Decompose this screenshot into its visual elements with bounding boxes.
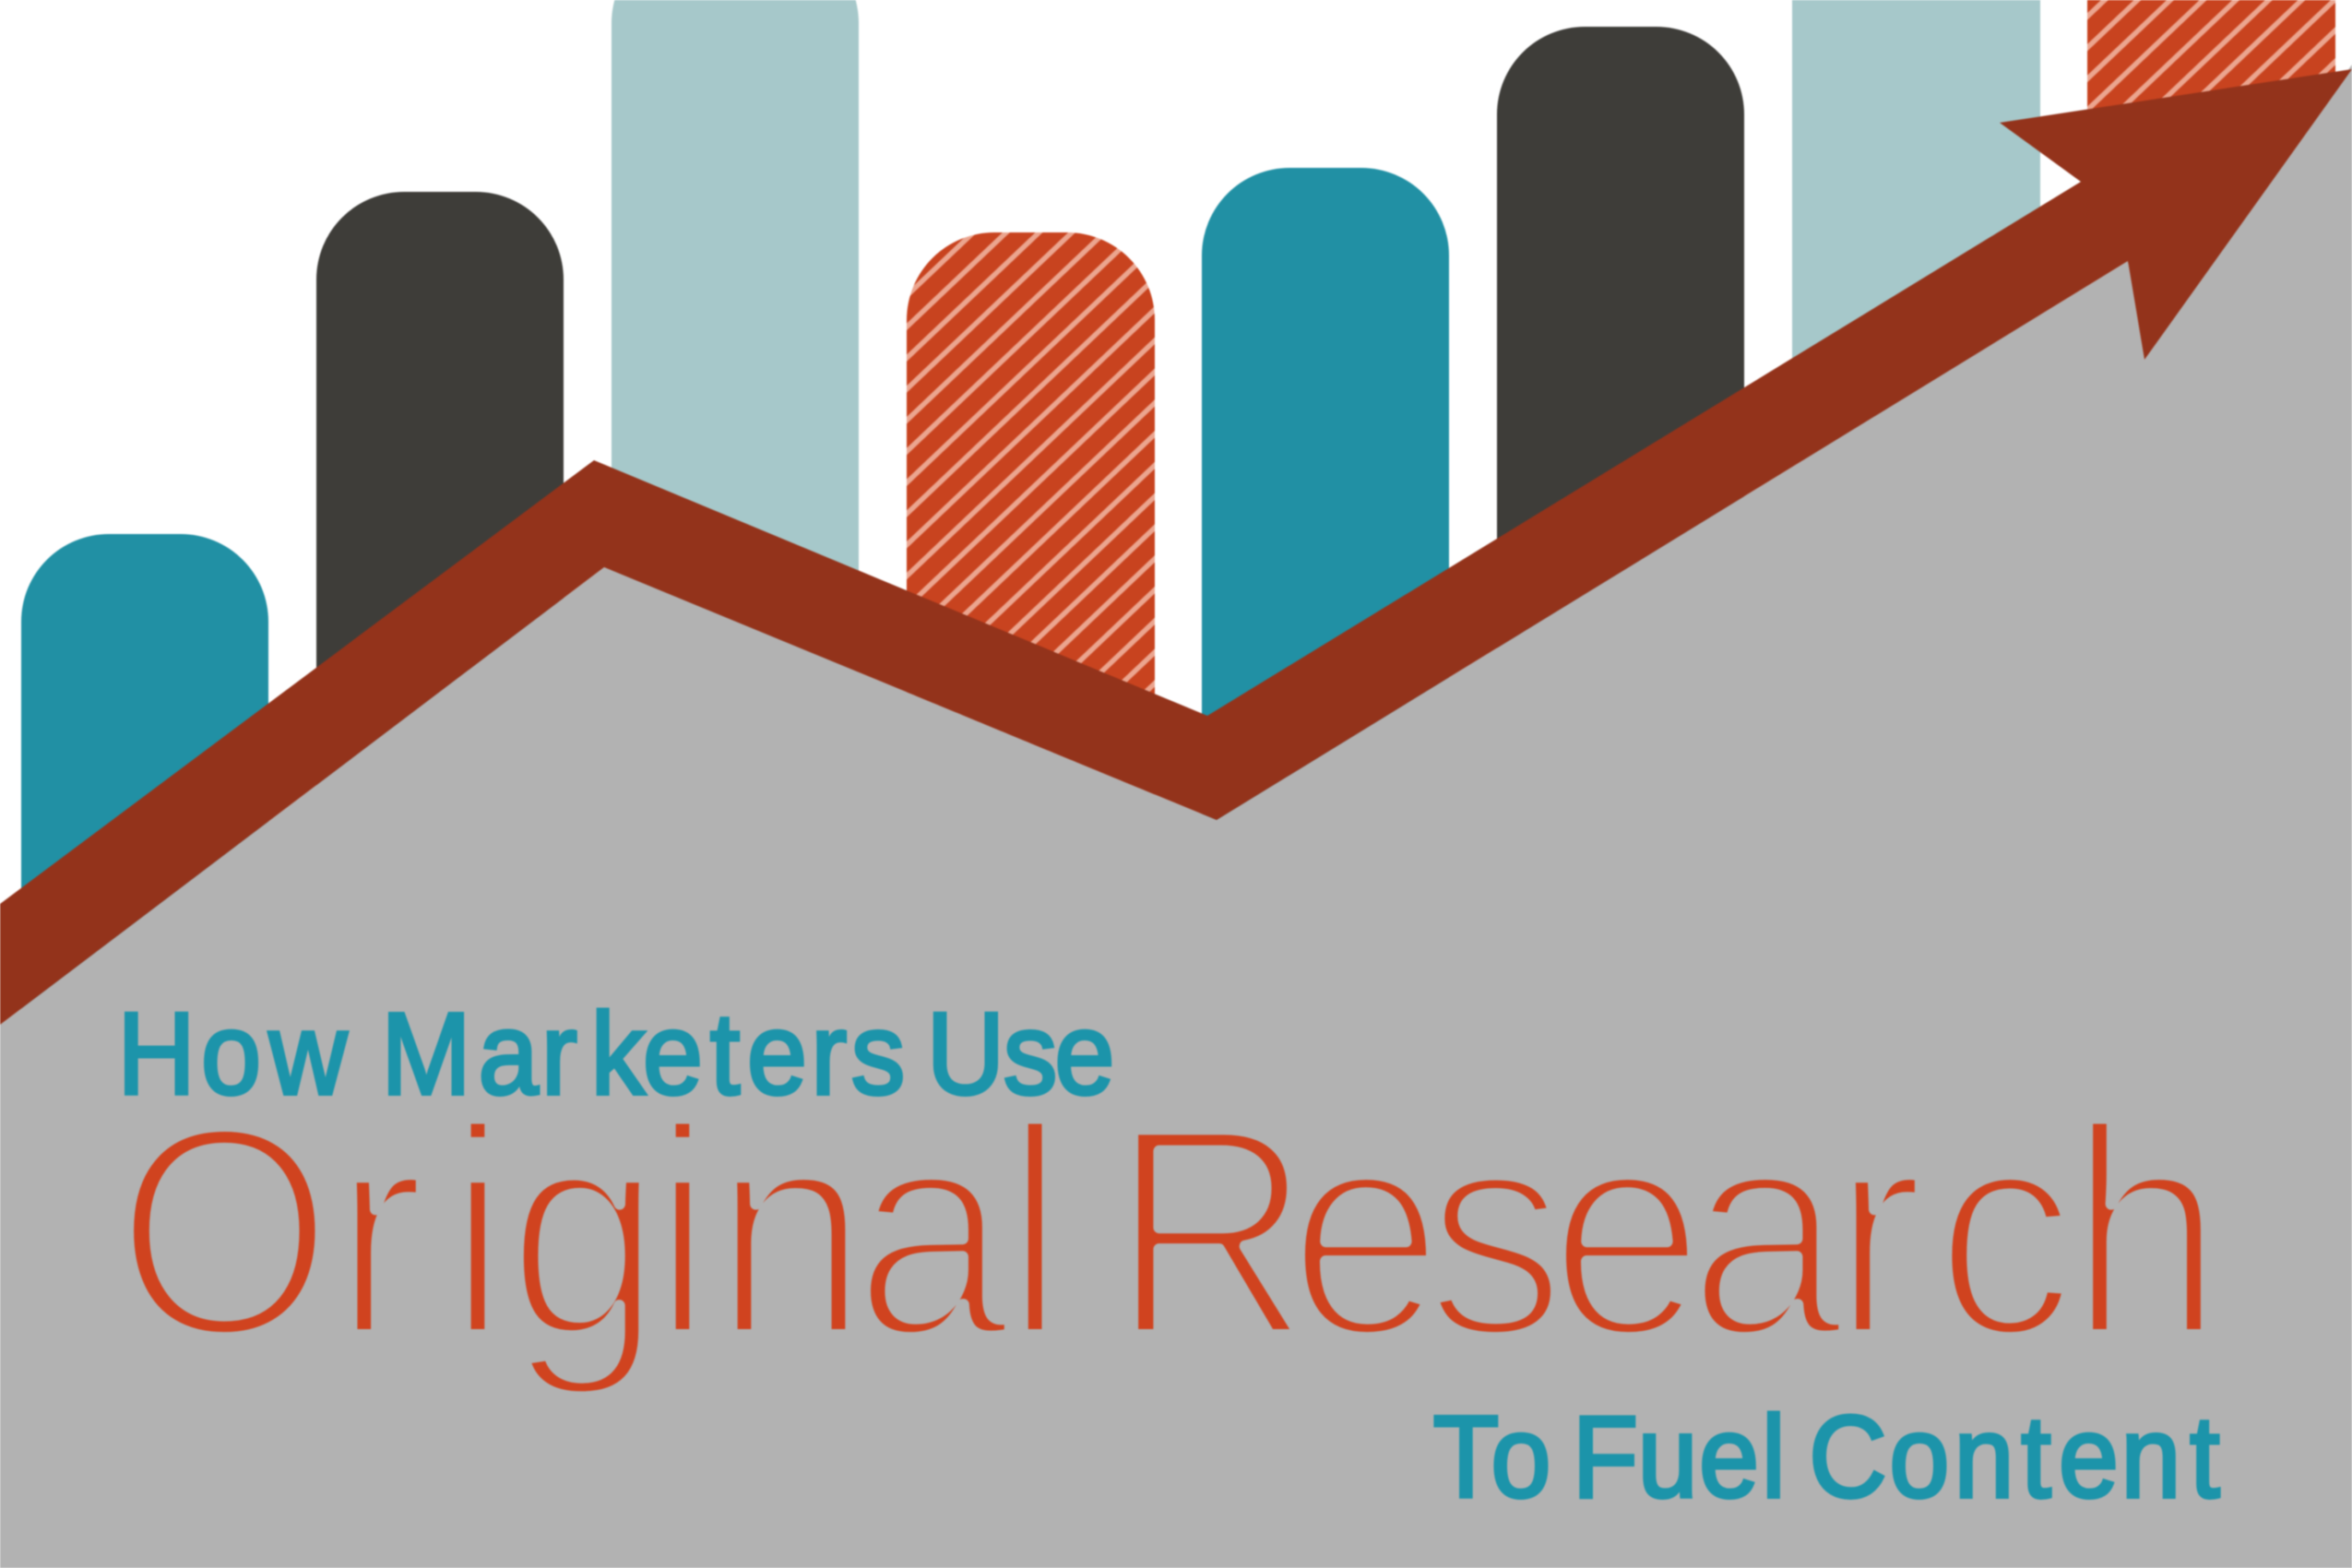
bar 3 light blue	[612, 0, 859, 766]
bar 8 hatched red	[2087, 0, 2335, 277]
bar chart	[21, 0, 2335, 1087]
bar 4 hatched red	[907, 232, 1155, 878]
bar 7 light blue	[1792, 0, 2040, 507]
title line 1: How Marketers Use	[117, 989, 1115, 1119]
bar 2 dark	[316, 192, 564, 1022]
title line 3: To Fuel Content	[1433, 1392, 2220, 1522]
bar 5 teal	[1202, 168, 1449, 906]
bar 6 dark	[1497, 27, 1744, 765]
title line 2: Original Research	[115, 1063, 2225, 1401]
bar 1 teal	[21, 534, 268, 1087]
trend arrow	[0, 69, 2352, 1025]
title	[115, 989, 2225, 1522]
